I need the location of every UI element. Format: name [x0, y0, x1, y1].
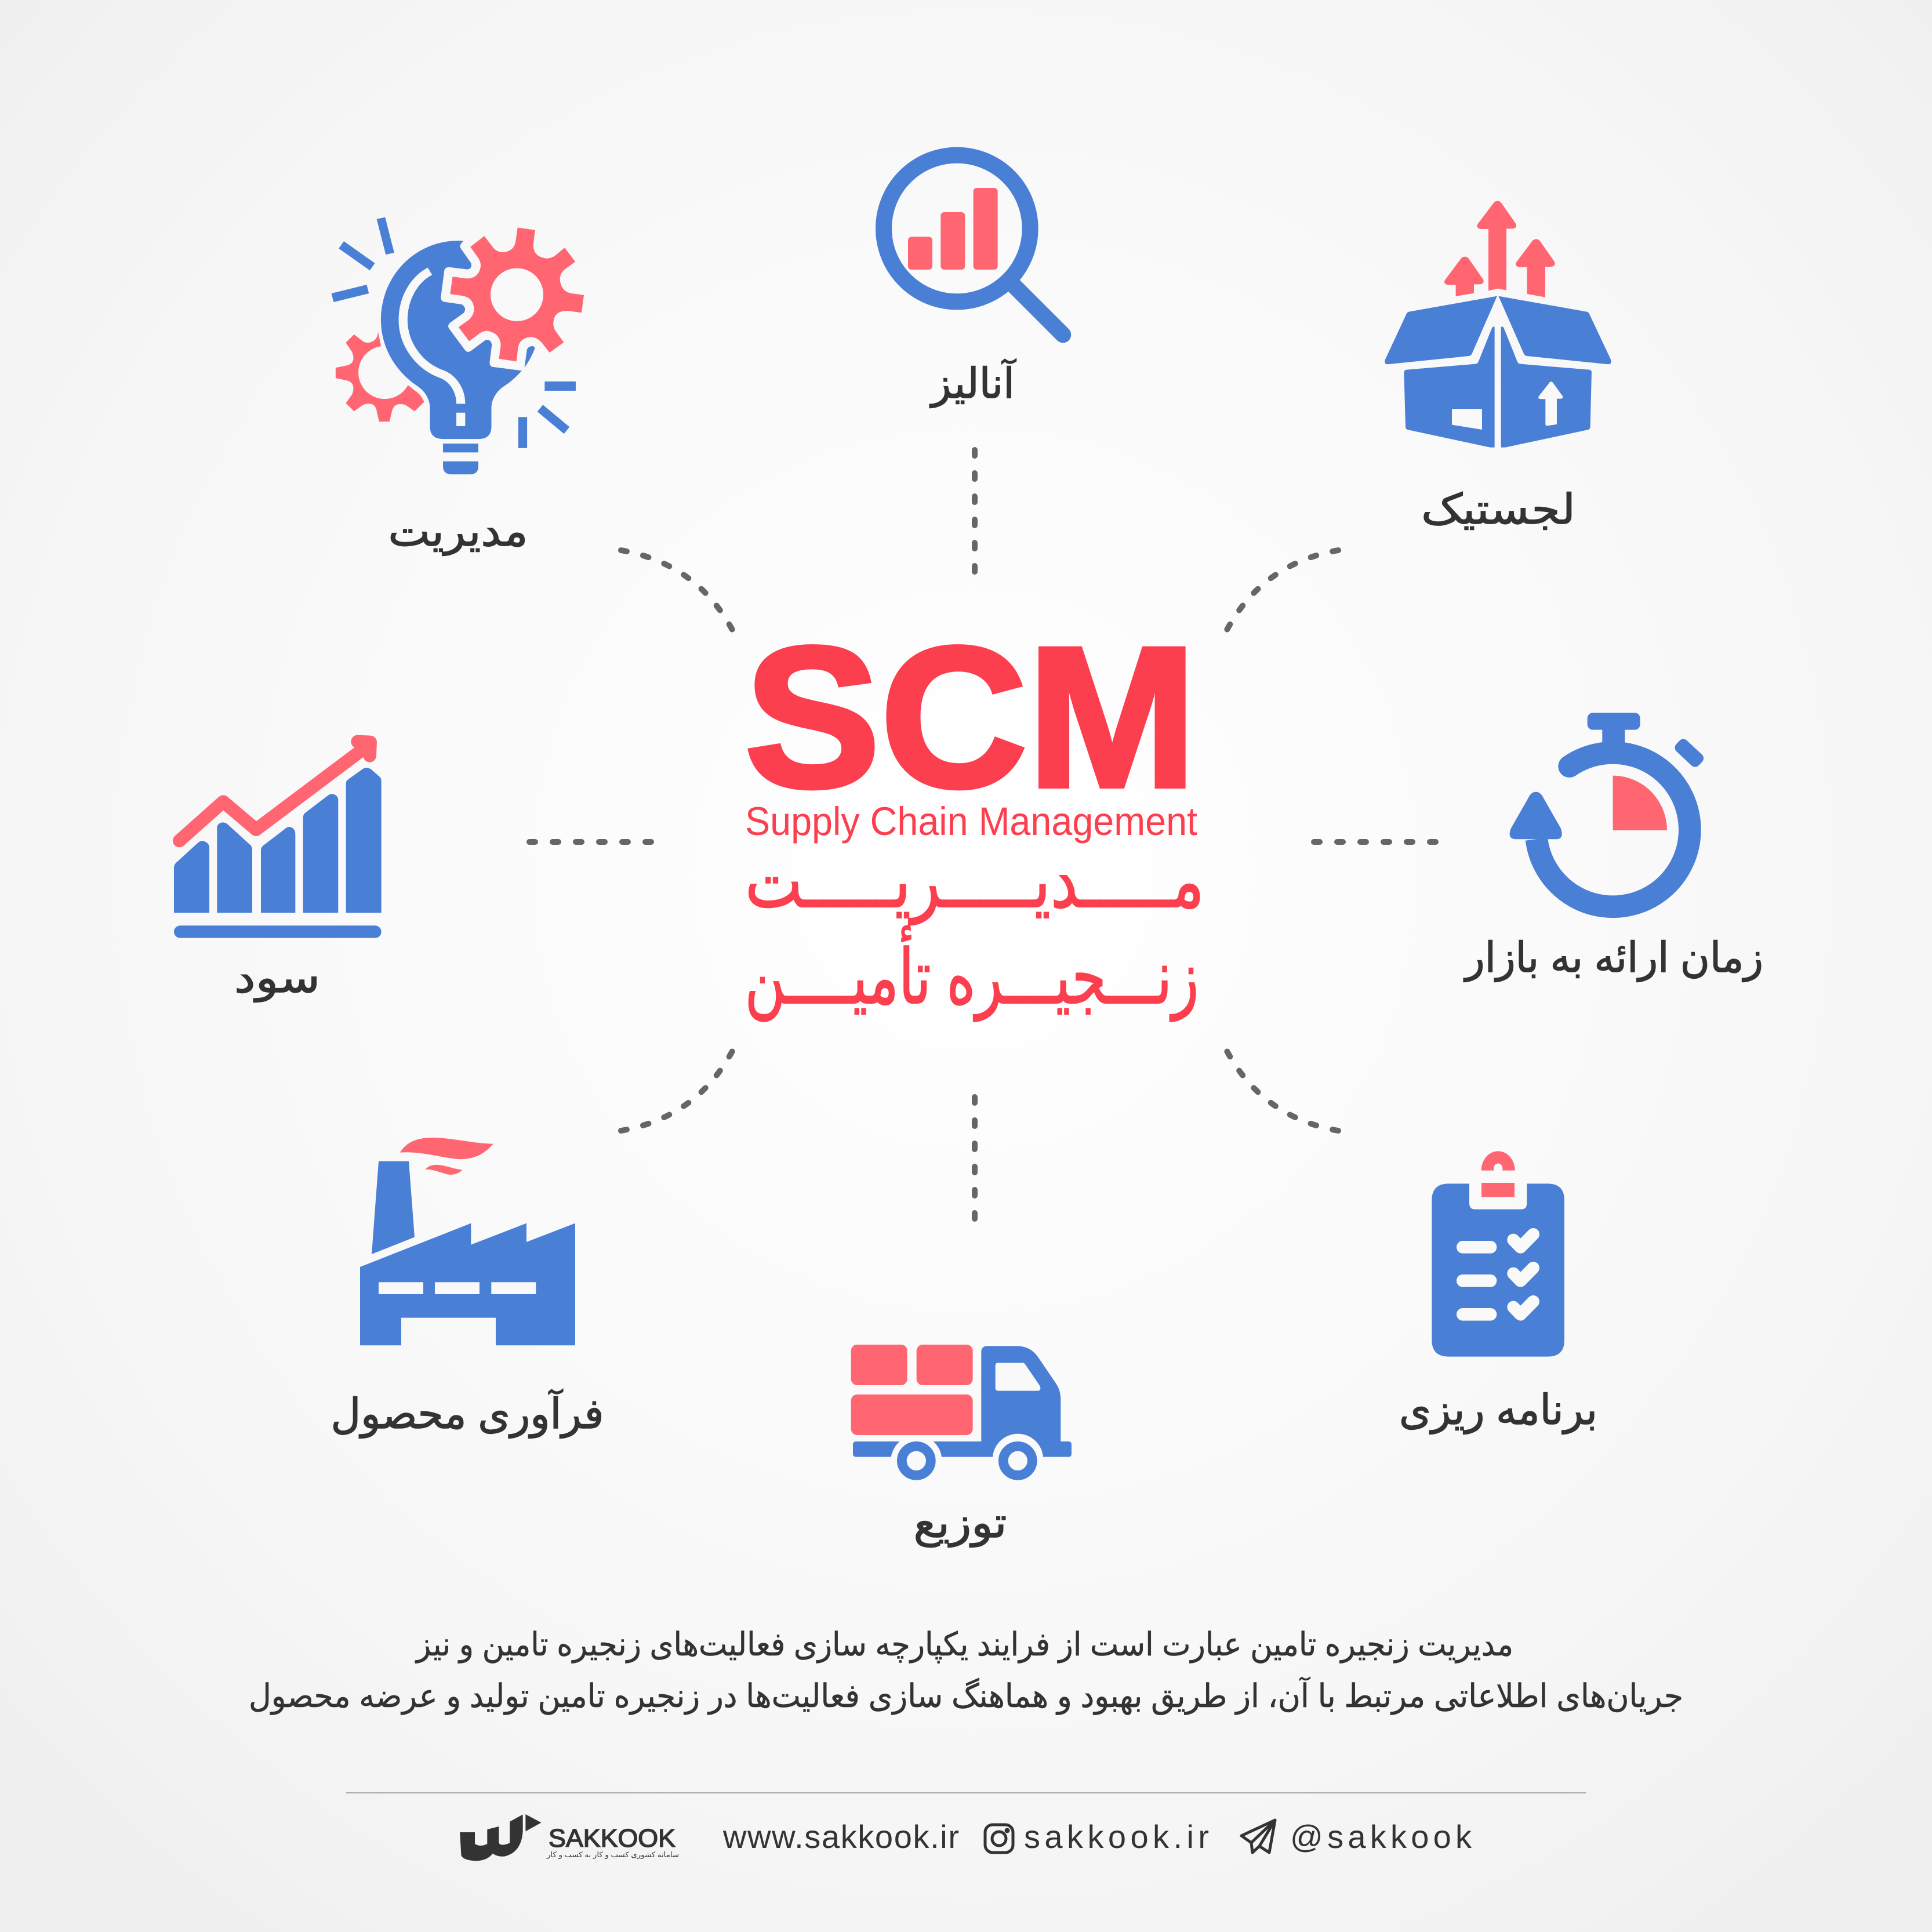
- title: SCM: SCM: [745, 606, 1197, 829]
- icon: clipboard (planning): [1432, 1151, 1564, 1357]
- cargo boxes: [851, 1345, 973, 1435]
- instagram handle: sakkook.ir: [1024, 1818, 1209, 1855]
- connector dashes: [529, 450, 1439, 1221]
- time sector: [1613, 776, 1667, 830]
- icon: magnifier with bars (analysis): [884, 155, 1063, 335]
- checklist: [1457, 1241, 1497, 1321]
- logo: Sakkook: [460, 1814, 679, 1861]
- Persian title line 2: زنـــجیـــره تأمیــــن: [745, 925, 1199, 1022]
- factory building: [360, 1161, 575, 1345]
- logo tagline: سامانه کشوری کسب و کار به کسب و کار: [546, 1850, 679, 1860]
- clip: [1481, 1151, 1515, 1197]
- bars: [908, 188, 998, 270]
- logo name: SAKKOOK: [549, 1824, 676, 1853]
- subtitle: Supply Chain Management: Supply Chain Management: [745, 799, 1197, 844]
- website: www.sakkook.ir: [722, 1818, 959, 1855]
- center title block: [745, 606, 1204, 1022]
- small gear: [336, 332, 424, 422]
- large gear: [450, 227, 584, 361]
- telegram handle: @sakkook: [1290, 1818, 1472, 1855]
- wheels: [902, 1446, 1032, 1475]
- icon: light bulb with gears (management): [332, 217, 584, 474]
- bulb body: [381, 241, 522, 439]
- label: management: مدیریت: [388, 509, 528, 556]
- icon: instagram: [985, 1825, 1013, 1853]
- Persian title line 1: مـــــدیـــــریـــــت: [745, 838, 1204, 925]
- icon: open box with arrows (logistics): [1385, 201, 1611, 448]
- description line 1: مدیریت زنجیره تامین عبارت است از فرایند یکپارچه سازی فعالیت‌های زنجیره تامین و نیز: [415, 1626, 1513, 1664]
- logo mark: [460, 1814, 542, 1861]
- stopwatch ring: [1510, 713, 1706, 907]
- light rays: [332, 217, 576, 448]
- label: time to market: زمان ارائه به بازار: [1463, 935, 1763, 982]
- magnifier: [884, 155, 1063, 335]
- clipboard body: [1432, 1183, 1564, 1357]
- bars: [174, 768, 382, 938]
- icon: stopwatch (time to market): [1510, 713, 1706, 907]
- label: analysis: آنالیز: [929, 358, 1016, 408]
- icon: factory (production): [360, 1138, 575, 1345]
- label: production: فرآوری محصول: [331, 1389, 604, 1439]
- footer: [460, 1814, 1472, 1861]
- box: [1385, 296, 1611, 448]
- icon: growth chart (profit): [174, 742, 382, 938]
- arrows: [1444, 201, 1555, 297]
- trend arrow: [179, 742, 371, 841]
- label: planning: برنامه ریزی: [1399, 1387, 1597, 1435]
- label: profit: سود: [234, 955, 320, 1003]
- icon: delivery truck (distribution): [851, 1345, 1072, 1475]
- item labels: [234, 358, 1763, 1548]
- smoke: [400, 1138, 493, 1175]
- truck cab and bed: [853, 1346, 1072, 1457]
- label: distribution: توزیع: [914, 1500, 1007, 1548]
- icon: telegram: [1241, 1820, 1275, 1853]
- label: logistics: لجستیک: [1421, 486, 1575, 533]
- description line 2: جریان‌های اطلاعاتی مرتبط با آن، از طریق بهبود و هماهنگ سازی فعالیت‌ها در زنجیره تامین تولید و عرضه محصول: [249, 1676, 1683, 1715]
- bulb base: [443, 444, 478, 452]
- description text: [249, 1626, 1683, 1715]
